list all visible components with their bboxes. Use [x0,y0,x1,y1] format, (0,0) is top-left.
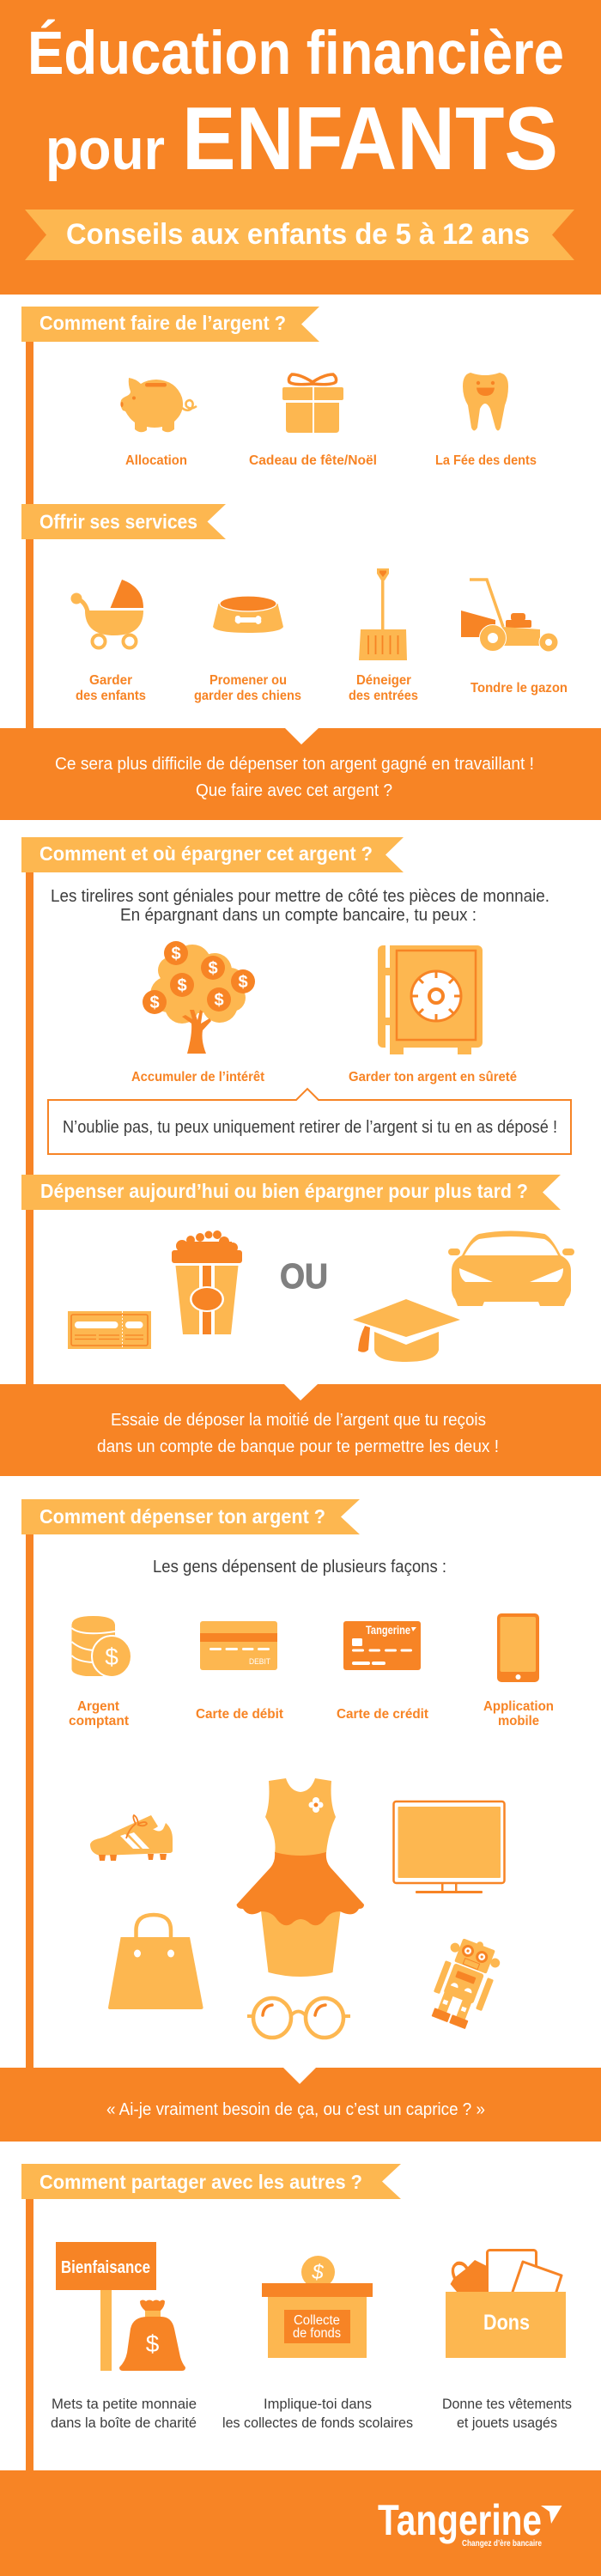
text: implique-toi: Implique-toi dans [264,2396,372,2412]
icon: fundraising box: $ [311,2261,324,2284]
label: garder des enfants: Garder [89,673,132,688]
banner: ce sera plus difficile [0,728,601,820]
icon: ticket [68,1311,151,1349]
callout: n'oublie pas [48,1089,571,1154]
text: tirelires [51,887,549,925]
ribbon: comment depenser [21,1499,360,1534]
icon: dog bowl [213,596,283,633]
text: ou: OU [280,1256,328,1296]
logo: tangerine: Changez d’ère bancaire [462,2538,542,2549]
ribbon: offrir ses services [21,504,226,539]
icon: dress [237,1778,364,1977]
icon: shovel [359,568,407,660]
icon: credit card: Tangerine [366,1623,410,1637]
icon: tooth [463,373,508,431]
title line 2: ENFANTS [182,89,558,189]
icon: credit card [343,1621,421,1670]
header panel [0,0,601,295]
text: tirelires: Les tirelires sont géniales pour mettre de côté tes pièces de monnaie. [51,887,549,906]
text: mets ta petite monnaie: dans la boîte de charité [51,2415,197,2431]
icon: popcorn [172,1230,242,1334]
icon: money tree [143,941,255,1054]
text: donne tes vetements: Donne tes vêtements [442,2396,572,2412]
text: donne tes vetements [442,2396,572,2431]
label: garder des enfants [76,673,146,703]
icon: stroller [70,580,143,647]
label: promener: Promener ou [209,673,287,688]
icon: money tree: $ [214,991,224,1010]
text: tirelires: En épargnant dans un compte bancaire, tu peux : [120,906,477,925]
ribbon: comment partager [21,2164,401,2199]
icon: fundraising box: Collecte [294,2313,340,2328]
title line 2: pour [46,117,165,182]
icon: fundraising box [262,2256,373,2358]
icon: glasses [247,1998,350,2038]
label: application mobile [483,1699,554,1728]
icon: charity sign and money bag [56,2242,185,2371]
ribbon: comment partager: Comment partager avec les autres ? [39,2171,362,2193]
callout: n'oublie pas: N’oublie pas, tu peux uniquement retirer de l’argent si tu en as déposé ! [63,1118,557,1137]
icon: money tree: $ [208,959,218,978]
label: carte de debit: Carte de débit [196,1707,284,1722]
icon: cash coins: $ [105,1643,118,1670]
label: deneiger: Déneiger [356,673,411,688]
label: carte de credit: Carte de crédit [337,1707,429,1722]
icon: monitor [393,1801,505,1893]
icon: cash coins [72,1616,131,1677]
icon: phone [497,1613,539,1682]
ribbon: depenser aujourd'hui [21,1175,561,1210]
icon: graduation cap [353,1299,460,1362]
label: promener [194,673,301,703]
label: application mobile: Application [483,1699,554,1714]
banner: essaie de deposer [0,1384,601,1476]
text: implique-toi [222,2396,413,2431]
icon: charity sign and money bag: $ [146,2330,160,2357]
icon: money tree: $ [149,993,160,1012]
icon: money tree: $ [238,973,248,992]
label: application mobile: mobile [498,1714,539,1728]
title line 2 [46,89,558,189]
text: implique-toi: les collectes de fonds scolaires [222,2415,413,2431]
label: tondre le gazon: Tondre le gazon [470,681,568,696]
ribbon: depenser aujourd'hui: Dépenser aujourd’hui ou bien épargner pour plus tard ? [40,1180,528,1202]
vertical bars [26,342,33,2472]
label: cadeau: Cadeau de fête/Noël [249,453,377,468]
icon: safe [378,945,483,1054]
icon: robot [425,1932,505,2032]
footer panel [0,2470,601,2576]
ribbon: comment faire de l'argent: Comment faire de l’argent ? [39,312,286,334]
banner: ce sera plus difficile: Ce sera plus difficile de dépenser ton argent gagné en travaillant ! [55,755,534,774]
label: argent comptant [69,1699,130,1728]
icon: debit card: DEBIT [249,1657,270,1667]
icon: charity sign and money bag: Bienfaisance [61,2258,150,2277]
subtitle ribbon [25,210,574,260]
label: accumuler de l'interet: Accumuler de l’intérêt [131,1070,265,1084]
icon: donation box [446,2250,566,2358]
label: argent comptant: comptant [69,1714,130,1728]
ribbon: offrir ses services: Offrir ses services [39,510,197,532]
banner: ai-je vraiment besoin: « Ai-je vraiment besoin de ça, ou c’est un caprice ? » [106,2100,485,2119]
label: allocation: Allocation [125,453,187,468]
icon: soccer cleat [90,1815,173,1861]
icon: shopping bag [108,1915,203,2009]
label: fee des dents: La Fée des dents [435,453,537,468]
banner: essaie de deposer: dans un compte de banque pour te permettre les deux ! [97,1437,499,1456]
icon: donation box: Dons [483,2311,530,2335]
icon: money tree: $ [177,976,187,995]
icon: gift [282,374,343,433]
text: les gens depensent: Les gens dépensent de plusieurs façons : [153,1558,446,1577]
ribbon: comment faire de l'argent [21,307,319,342]
logo: tangerine: Tangerine [378,2496,542,2544]
icon: car [448,1231,574,1306]
icon: fundraising box: de fonds [293,2326,341,2341]
text: donne tes vetements: et jouets usagés [457,2415,557,2431]
text: mets ta petite monnaie: Mets ta petite monnaie [52,2396,197,2412]
icon: lawn mower [461,580,558,652]
label: deneiger: des entrées [349,689,418,703]
label: garder des enfants: des enfants [76,689,146,703]
text: mets ta petite monnaie [51,2396,197,2431]
ribbon: comment depenser: Comment dépenser ton argent ? [39,1505,325,1528]
subtitle ribbon: Conseils aux enfants de 5 à 12 ans [66,218,530,251]
label: promener: garder des chiens [194,689,301,703]
icon: piggy bank [120,378,197,432]
label: garder ton argent: Garder ton argent en sûreté [349,1070,517,1084]
label: deneiger [349,673,418,703]
icon: money tree: $ [171,945,181,963]
banner: ai-je vraiment besoin [0,2068,601,2142]
banner: essaie de deposer: Essaie de déposer la moitié de l’argent que tu reçois [111,1411,486,1430]
ribbon: comment et ou epargner [21,837,404,872]
ribbon: comment et ou epargner: Comment et où épargner cet argent ? [39,842,373,865]
label: argent comptant: Argent [77,1699,120,1714]
icon: debit card [200,1621,277,1670]
banner: ce sera plus difficile: Que faire avec cet argent ? [196,781,392,800]
